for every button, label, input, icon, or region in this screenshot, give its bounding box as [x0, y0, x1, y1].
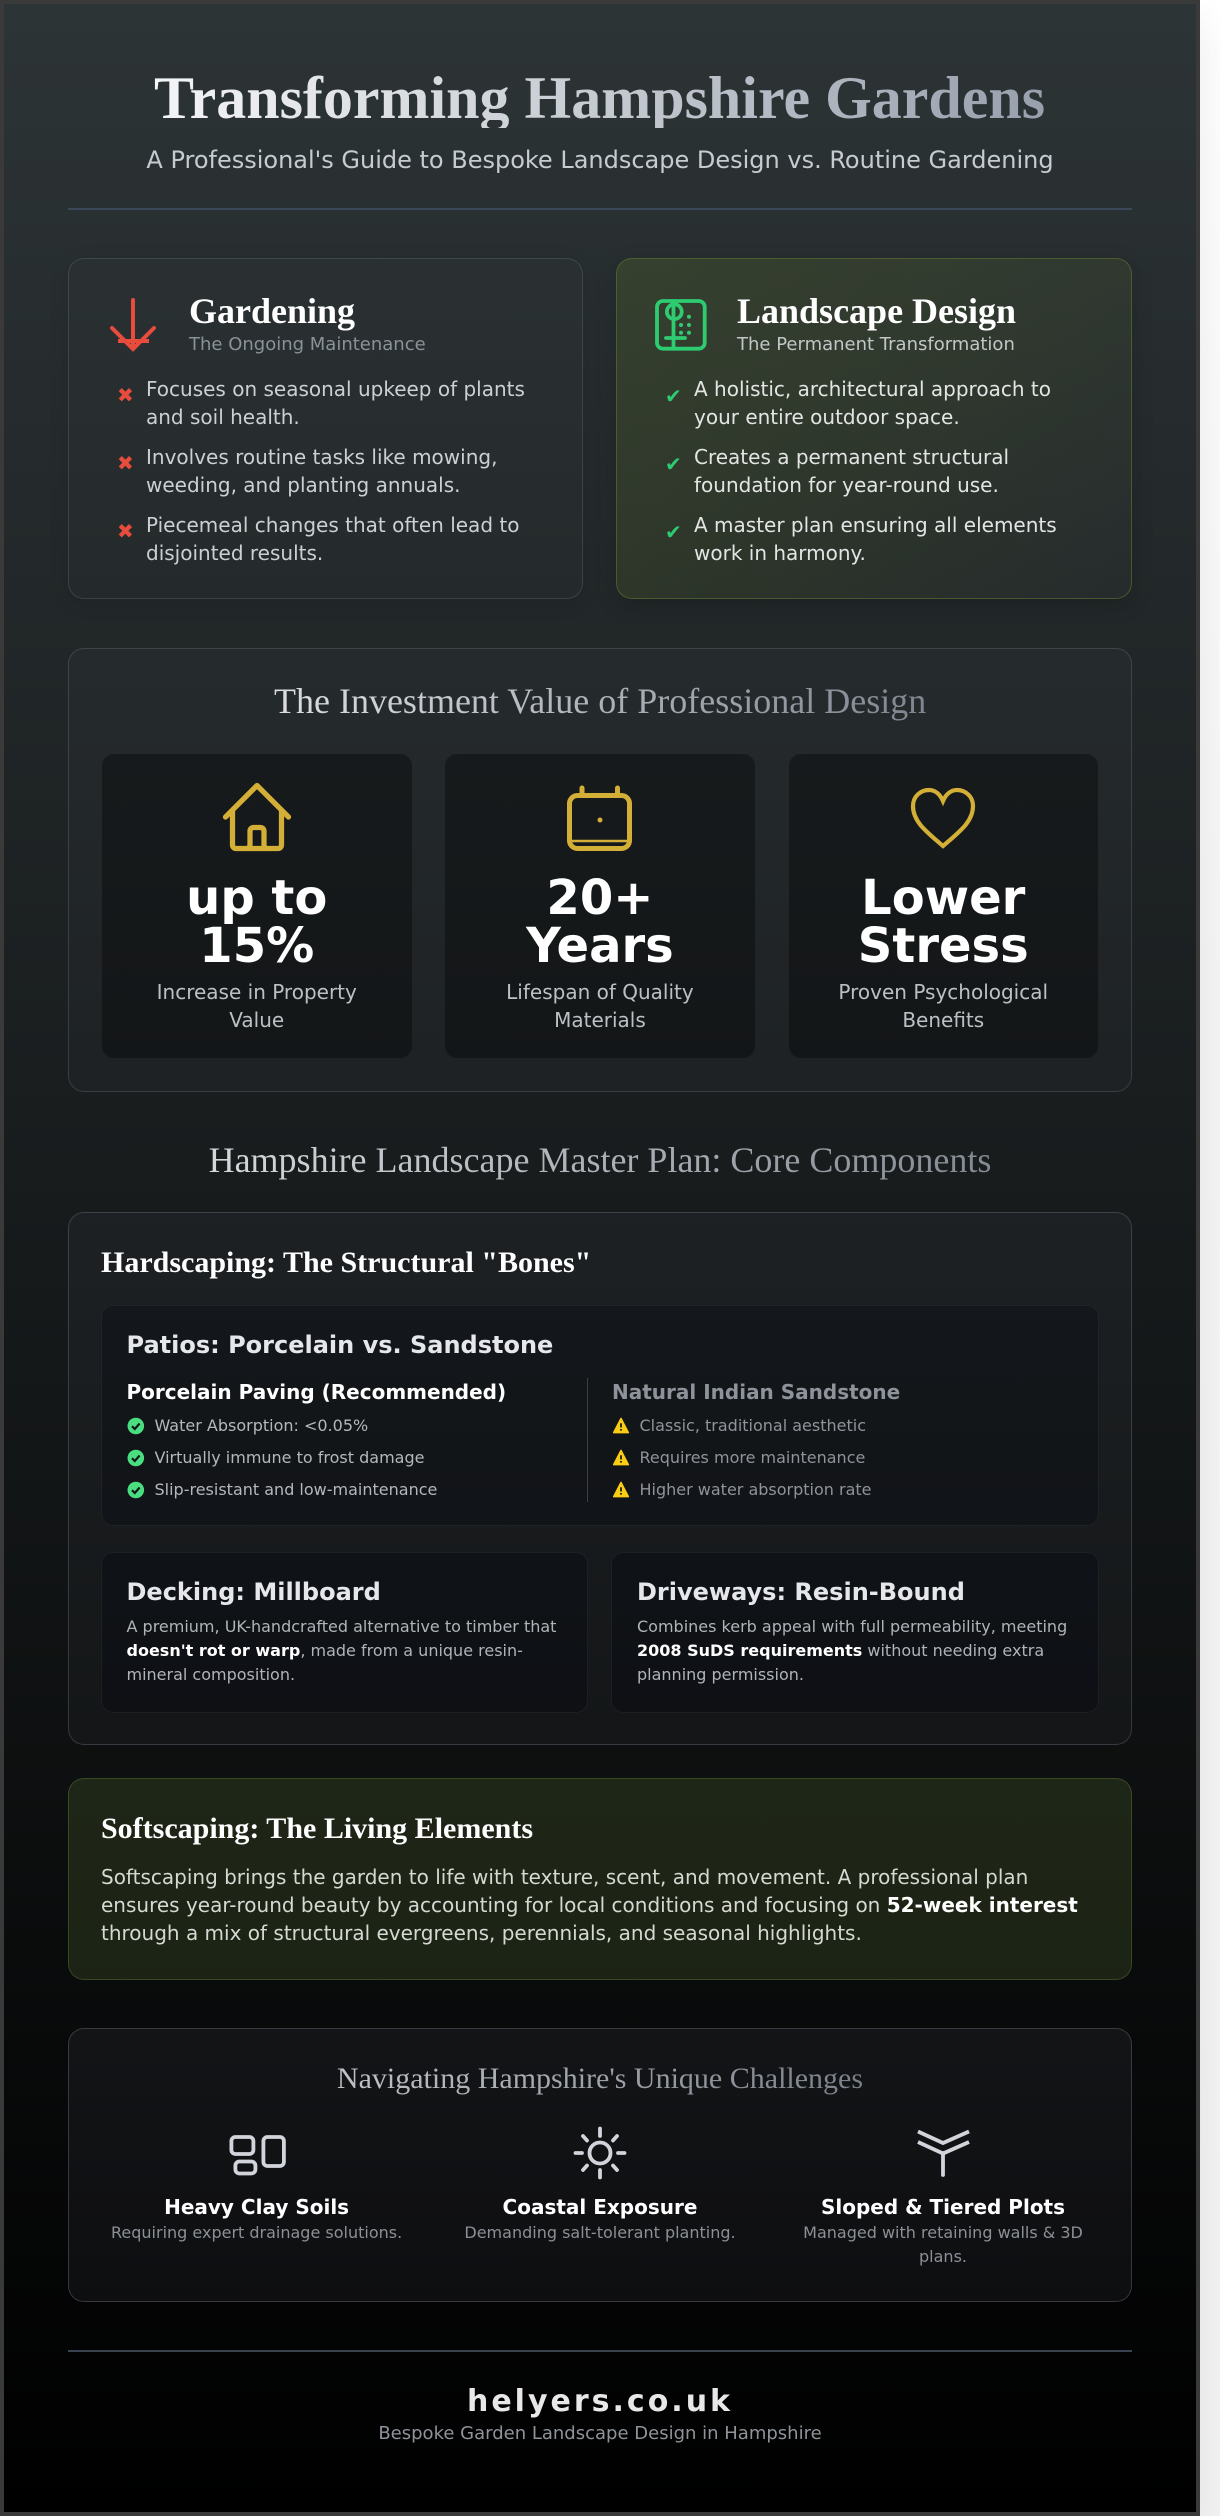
stat value: Years: [526, 918, 674, 974]
list item: [117, 513, 519, 565]
list item: Focuses on seasonal upkeep of plants: [146, 377, 525, 401]
subheading: landscape design: The Permanent Transformation: [737, 334, 1015, 355]
text: decking: [126, 1617, 556, 1684]
stat label: Proven Psychological: [838, 980, 1048, 1004]
challenge: sloped plots: [803, 2130, 1083, 2266]
list item: A holistic, architectural approach to: [694, 377, 1051, 401]
stat value: Lower: [861, 870, 1025, 926]
challenge title: Heavy Clay Soils: [164, 2195, 349, 2219]
list item: your entire outdoor space.: [694, 405, 960, 429]
heading: patios: Patios: Porcelain vs. Sandstone: [126, 1331, 553, 1359]
stat: lifespan: [445, 754, 755, 1058]
feature: frost: Virtually immune to frost damage: [154, 1448, 424, 1466]
stat: wellbeing: [788, 754, 1098, 1058]
stat label: [157, 980, 357, 1032]
header: [146, 65, 1054, 174]
heading: hardscaping: Hardscaping: The Structural "Bones": [101, 1246, 591, 1279]
list item: ✖: [117, 451, 134, 475]
heading: decking: Decking: Millboard: [126, 1578, 381, 1606]
text: softscaping: [101, 1865, 1078, 1945]
list item: [665, 513, 1057, 565]
list item: weeding, and planting annuals.: [146, 473, 460, 497]
feature: absorption: Water Absorption: <0.05%: [154, 1416, 368, 1434]
list item: Involves routine tasks like mowing,: [146, 445, 497, 469]
panel: investment value: [68, 648, 1132, 1092]
text: driveways: planning permission.: [637, 1665, 804, 1684]
list item: ✖: [117, 519, 134, 543]
list item: ✔: [665, 452, 682, 476]
text: softscaping: Softscaping brings the garden to life with texture, scent, and movement. A professional plan: [101, 1865, 1028, 1889]
stat label: Value: [229, 1008, 284, 1032]
stat value: 20+: [546, 870, 653, 926]
list item: Piecemeal changes that often lead to: [146, 513, 519, 537]
subtitle: A Professional's Guide to Bespoke Landscape Design vs. Routine Gardening: [146, 146, 1054, 174]
challenge text: plans.: [919, 2246, 967, 2266]
challenge title: Coastal Exposure: [503, 2195, 697, 2219]
panel: hardscaping: [68, 1212, 1132, 1745]
challenge text: Requiring expert drainage solutions.: [111, 2222, 402, 2242]
card: patios: [101, 1305, 1099, 1526]
section heading: master plan: Hampshire Landscape Master Plan: Core Components: [209, 1140, 991, 1180]
icon: house: [222, 782, 292, 852]
challenge text: [803, 2222, 1083, 2266]
title: Transforming Hampshire Gardens: [154, 65, 1045, 131]
text: decking: mineral composition.: [126, 1665, 295, 1684]
stat label: Materials: [554, 1008, 646, 1032]
panel: landscape design: [616, 258, 1132, 599]
stat label: [838, 980, 1048, 1032]
card: decking: [101, 1552, 588, 1713]
challenge text: Managed with retaining walls & 3D: [803, 2222, 1083, 2242]
panel: challenges: [68, 2028, 1132, 2302]
icon: calendar: [567, 786, 632, 851]
heading: landscape design: Landscape Design: [737, 291, 1016, 331]
card: driveways: [611, 1552, 1099, 1713]
stat: property value: [102, 754, 412, 1058]
list item: [117, 445, 497, 497]
tagline: Bespoke Garden Landscape Design in Hampshire: [378, 2423, 822, 2444]
text: softscaping: through a mix of structural evergreens, perennials, and seasonal highlights.: [101, 1921, 862, 1945]
text: decking: A premium, UK-handcrafted alternative to timber that: [126, 1617, 556, 1636]
list item: ✔: [665, 520, 682, 544]
list item: [665, 377, 1051, 429]
icon: down arrow: [110, 298, 156, 352]
challenge: coastal: [464, 2126, 736, 2242]
text: driveways: 2008 SuDS requirements without needing extra: [637, 1641, 1044, 1660]
stat value: [186, 870, 327, 974]
stat label: [506, 980, 694, 1032]
heading: driveways: Driveways: Resin-Bound: [637, 1578, 965, 1606]
stat label: Increase in Property: [157, 980, 357, 1004]
brand: helyers.co.uk: [467, 2384, 733, 2418]
text: decking: doesn't rot or warp, made from a unique resin-: [126, 1641, 523, 1660]
list item: and soil health.: [146, 405, 300, 429]
footer: [68, 2350, 1132, 2450]
list item: Creates a permanent structural: [694, 445, 1009, 469]
stat value: Stress: [858, 918, 1029, 974]
stat value: [858, 870, 1029, 974]
text: driveways: Combines kerb appeal with full permeability, meeting: [637, 1617, 1067, 1636]
feature: absorption rate: Higher water absorption rate: [640, 1480, 872, 1498]
subheading: gardening: The Ongoing Maintenance: [189, 334, 426, 355]
stat label: Benefits: [902, 1008, 984, 1032]
feature: maintenance: Requires more maintenance: [640, 1448, 865, 1466]
icon: landscape plan: [655, 299, 707, 351]
challenge title: Sloped & Tiered Plots: [821, 2195, 1065, 2219]
text: driveways: [637, 1617, 1067, 1684]
text: softscaping: ensures year-round beauty by accounting for local conditions and focusing on 52-week interest: [101, 1893, 1078, 1917]
heading: gardening: Gardening: [189, 291, 355, 331]
stat value: 15%: [199, 918, 314, 974]
heading: investment value: The Investment Value of Professional Design: [274, 681, 926, 721]
list item: work in harmony.: [694, 541, 866, 565]
list item: disjointed results.: [146, 541, 323, 565]
subheading: sandstone: Natural Indian Sandstone: [612, 1380, 900, 1404]
icon: sun: [574, 2126, 626, 2180]
heading: softscaping: Softscaping: The Living Elements: [101, 1812, 533, 1845]
feature: classic: Classic, traditional aesthetic: [640, 1416, 866, 1434]
list item: [117, 377, 525, 429]
list item: A master plan ensuring all elements: [694, 513, 1057, 537]
panel: softscaping: [68, 1778, 1132, 1980]
stat value: up to: [186, 870, 327, 926]
stat value: [526, 870, 674, 974]
heading: challenges: Navigating Hampshire's Unique Challenges: [337, 2062, 863, 2095]
list item: foundation for year-round use.: [694, 473, 999, 497]
challenge: clay soils: [111, 2135, 402, 2242]
panel: gardening: [68, 258, 583, 599]
icon: heart: [910, 788, 976, 849]
feature: slip resistant: Slip-resistant and low-maintenance: [154, 1480, 437, 1498]
subheading: porcelain: Porcelain Paving (Recommended): [126, 1380, 506, 1404]
list item: ✔: [665, 384, 682, 408]
icon: soil blocks: [230, 2135, 286, 2176]
challenge text: Demanding salt-tolerant planting.: [464, 2222, 736, 2242]
stat label: Lifespan of Quality: [506, 980, 694, 1004]
list item: [665, 445, 1009, 497]
icon: tiered slope: [917, 2130, 970, 2177]
list item: ✖: [117, 383, 134, 407]
